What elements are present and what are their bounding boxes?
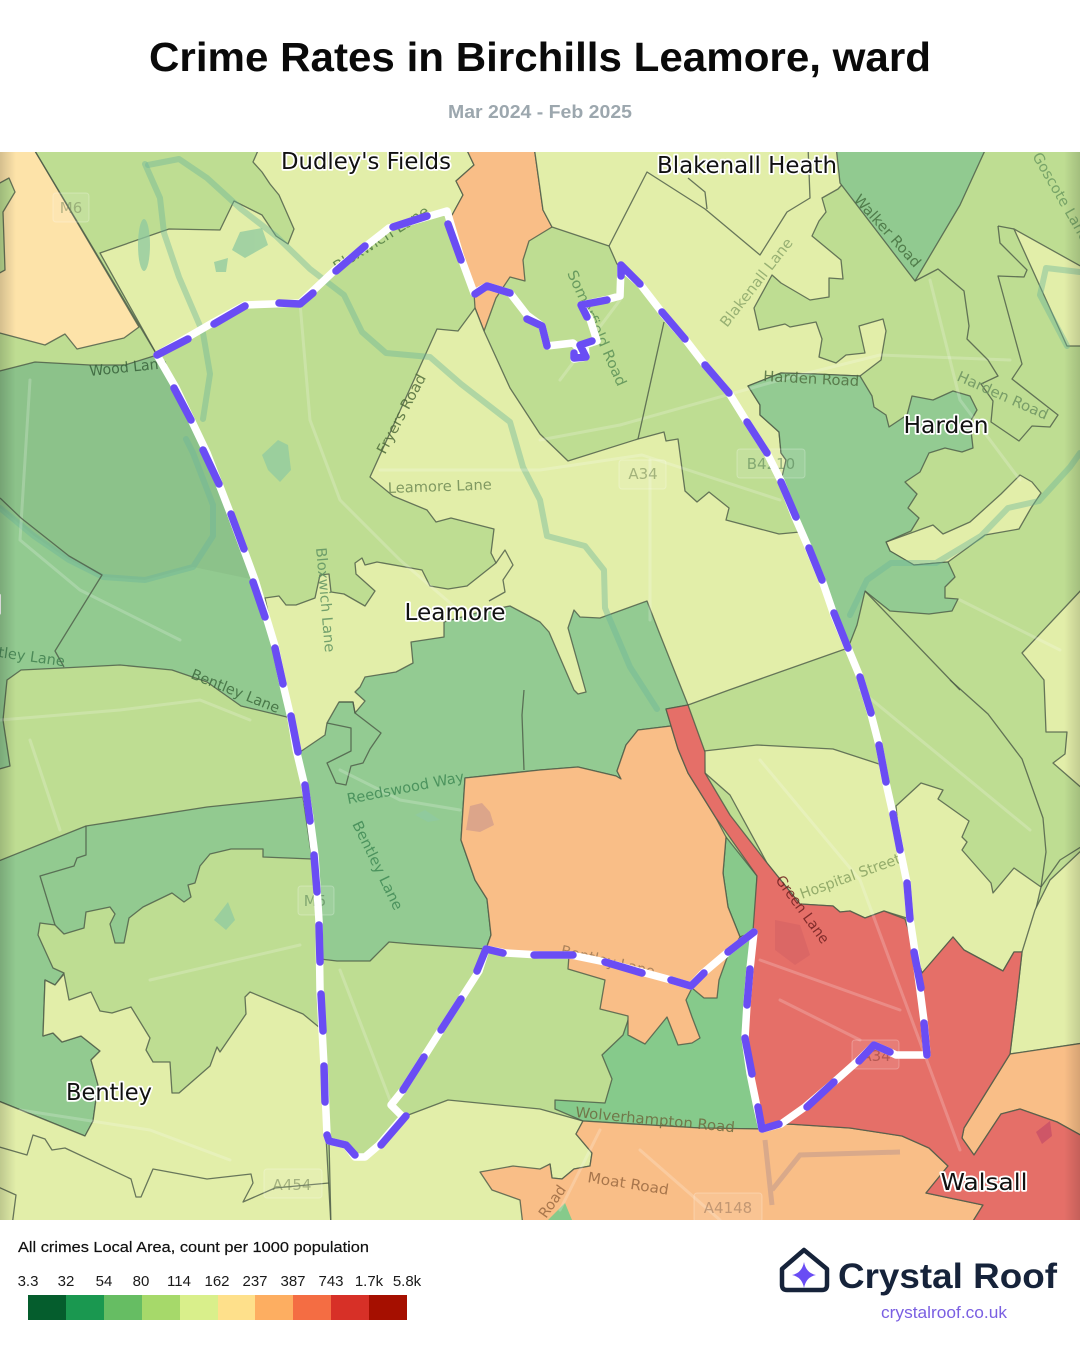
legend scale values: 743 — [318, 1273, 344, 1290]
region: Hospital Street yellow — [704, 745, 910, 919]
road labels: Bentley Lane — [189, 667, 282, 717]
road badges: A34 — [861, 1047, 891, 1065]
road labels: Fryers Road — [374, 372, 430, 457]
legend scale values: 1.7k — [355, 1273, 384, 1290]
region: Harden dark green — [748, 373, 977, 648]
region: orange north wedge — [447, 146, 552, 331]
road labels: Road — [536, 1183, 570, 1221]
region: green patch beside Green Lane — [723, 837, 757, 937]
legend — [18, 1239, 422, 1320]
road badges: A454 — [273, 1176, 311, 1194]
logo: Crystal Roof — [782, 1250, 1057, 1322]
region: high-crime red — [666, 705, 1080, 1226]
place labels — [0, 149, 1028, 1196]
road labels: Bloxwich Lane — [312, 547, 337, 653]
legend scale values: 114 — [167, 1273, 191, 1290]
road labels: Bentley Lane — [559, 943, 656, 981]
road labels: Hospital Street — [798, 851, 903, 903]
choropleth map panel — [0, 146, 1080, 1226]
logo wordmark: Crystal Roof — [838, 1257, 1057, 1296]
region: cream north-west — [0, 146, 139, 349]
region: south orange — [480, 1121, 983, 1226]
map edge shading — [0, 152, 1080, 1220]
road labels: Wood Lane — [89, 356, 168, 380]
road labels: Bentley Lane — [348, 819, 405, 913]
road labels: Harden Road — [954, 369, 1050, 424]
place labels: Harden — [904, 413, 988, 439]
region: south-centre green — [555, 932, 762, 1129]
road labels: Somerfield Road — [563, 268, 629, 389]
legend colour swatches — [28, 1295, 407, 1320]
road badges: M5 — [304, 892, 326, 910]
road labels: Bloxwich Lane — [331, 203, 432, 275]
legend scale values: 387 — [280, 1273, 306, 1290]
road badges: A4148 — [704, 1199, 752, 1217]
icon: house with star — [782, 1250, 827, 1290]
legend scale values — [18, 1273, 422, 1290]
darker building tints — [1036, 1121, 1052, 1144]
region: Blakenall Heath yellow — [534, 146, 886, 490]
road labels: Harden Road — [763, 369, 859, 390]
legend scale values: 32 — [58, 1273, 74, 1290]
logo url: crystalroof.co.uk — [881, 1304, 1008, 1322]
region: north-east dark green — [836, 146, 987, 281]
road labels: Wolverhampton Road — [575, 1105, 735, 1136]
region: far east yellow — [1010, 848, 1080, 1054]
region: Bentley yellow — [0, 974, 331, 1226]
place labels: Leamore — [404, 600, 506, 626]
legend scale values: 3.3 — [18, 1273, 38, 1290]
legend scale values: 54 — [96, 1273, 112, 1290]
place labels: Dudley's Fields — [281, 149, 451, 175]
road badges: M6 — [60, 199, 82, 217]
road labels: Leamore Lane — [388, 477, 492, 497]
place labels: Bentley — [66, 1080, 152, 1106]
region: inner medium green pocket — [327, 702, 381, 785]
region: central orange — [461, 726, 740, 1045]
region: south-west dark green — [0, 797, 312, 1136]
region: Dudley's Fields yellow — [100, 146, 474, 355]
region: west dark green — [0, 355, 291, 770]
ward boundary: white line with purple dashes — [157, 211, 927, 1157]
road labels: Blakenall Lane — [718, 235, 797, 330]
road labels: Walker Road — [850, 192, 923, 271]
title: Crime Rates in Birchills Leamore, ward — [149, 34, 931, 80]
road labels: Moat Road — [586, 1170, 670, 1199]
legend scale values: 5.8k — [393, 1273, 422, 1290]
rivers — [0, 159, 1080, 709]
region: south yellow — [329, 1100, 592, 1226]
road labels: Green Lane — [772, 873, 832, 947]
road badges — [53, 193, 899, 1222]
road badges: B4210 — [747, 455, 795, 473]
legend title: All crimes Local Area, count per 1000 population — [18, 1239, 369, 1256]
road badges: A34 — [628, 465, 658, 483]
region: yellow east of ward — [896, 783, 1041, 973]
legend scale values: 237 — [242, 1273, 268, 1290]
subtitle: date range: Mar 2024 - Feb 2025 — [448, 102, 632, 122]
region: central dark green — [300, 601, 688, 961]
region: darker tint above west river — [0, 355, 255, 580]
ponds — [138, 219, 440, 930]
place labels: Blakenall Heath — [657, 153, 837, 179]
place labels: Walsall — [940, 1170, 1028, 1196]
legend scale values: 80 — [133, 1273, 149, 1290]
road labels: Reedswood Way — [346, 769, 466, 808]
roads — [0, 280, 1060, 1220]
region: south-east orange — [962, 1043, 1080, 1155]
region: central Leamore yellow — [265, 308, 848, 752]
boundary lines — [0, 146, 1080, 1226]
road labels — [0, 150, 1080, 1221]
legend scale values: 162 — [204, 1273, 230, 1290]
